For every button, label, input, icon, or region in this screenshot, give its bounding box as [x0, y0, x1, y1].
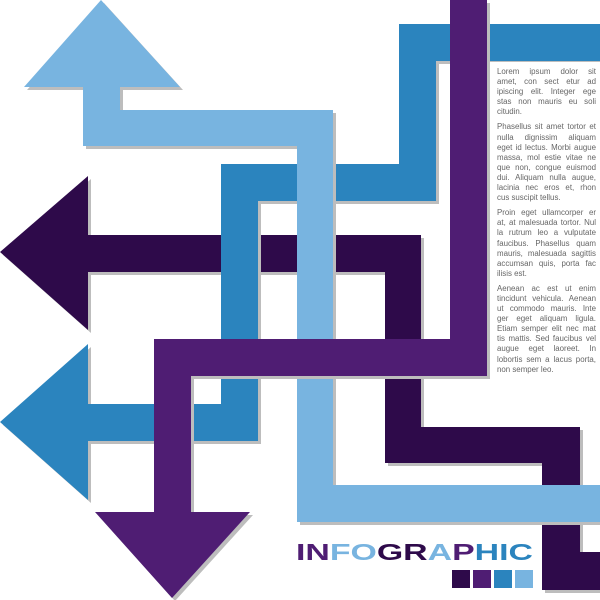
arrow: purple down — [95, 0, 490, 600]
colour squares — [452, 570, 533, 588]
text block: Phasellus sit amet tortor et — [497, 122, 596, 131]
text block: cus suscipit tellus. — [497, 193, 561, 202]
text block — [497, 67, 596, 374]
text block: accumsan quis, porta fac — [497, 259, 596, 268]
text block: nulla dignissim aliquam — [497, 133, 596, 142]
arrow: medium blue left — [0, 24, 600, 503]
title: INFOGRAPHIC: IN FO GR A P HIC — [296, 539, 533, 565]
text block: dui. Aliquam nulla augue, — [497, 173, 596, 182]
text block: lacinia nec eros et, rhon — [497, 183, 596, 192]
text block: Etiam semper elit nec mat — [497, 324, 596, 333]
text block: tis mattis. Sed faucibus vel — [497, 334, 596, 343]
text block: ilisis est. — [497, 269, 527, 278]
text block: tincidunt vehicula. Aenean — [497, 294, 596, 303]
text block: massa, mol estie vitae ne — [497, 153, 596, 162]
text block: amet, con sect etur ad — [497, 77, 596, 86]
text block: augue eget laoreet. In — [497, 344, 596, 353]
arrow: dark purple left — [0, 176, 600, 593]
text box background — [490, 62, 600, 382]
text block: mauris, malesuada sagittis — [497, 249, 596, 258]
text block: ut commodo mauris. Inte — [497, 304, 596, 313]
text block: lobortis sem a lacus porta, — [497, 355, 596, 364]
text block: eget id lectus. Morbi augue — [497, 143, 596, 152]
text block: ger eget aliquam ligula. — [497, 314, 596, 323]
text block: Lorem ipsum dolor sit — [497, 67, 596, 76]
text block: que non, congue euismod — [497, 163, 596, 172]
text block: Proin eget ullamcorper er — [497, 208, 596, 217]
text block: Aenean ac est ut enim — [497, 284, 596, 293]
text block: faucibus. Phasellus quam — [497, 238, 596, 248]
text block: ipiscing elit. Integer ege — [497, 87, 596, 96]
text block: at, at malesuada tortor. Nul — [497, 218, 596, 227]
text block: la rutrum leo a vulputate — [497, 228, 596, 237]
text block: stas non mauris eu soli — [497, 97, 596, 106]
text block: non semper leo. — [497, 365, 554, 374]
text block: citudin. — [497, 107, 522, 116]
